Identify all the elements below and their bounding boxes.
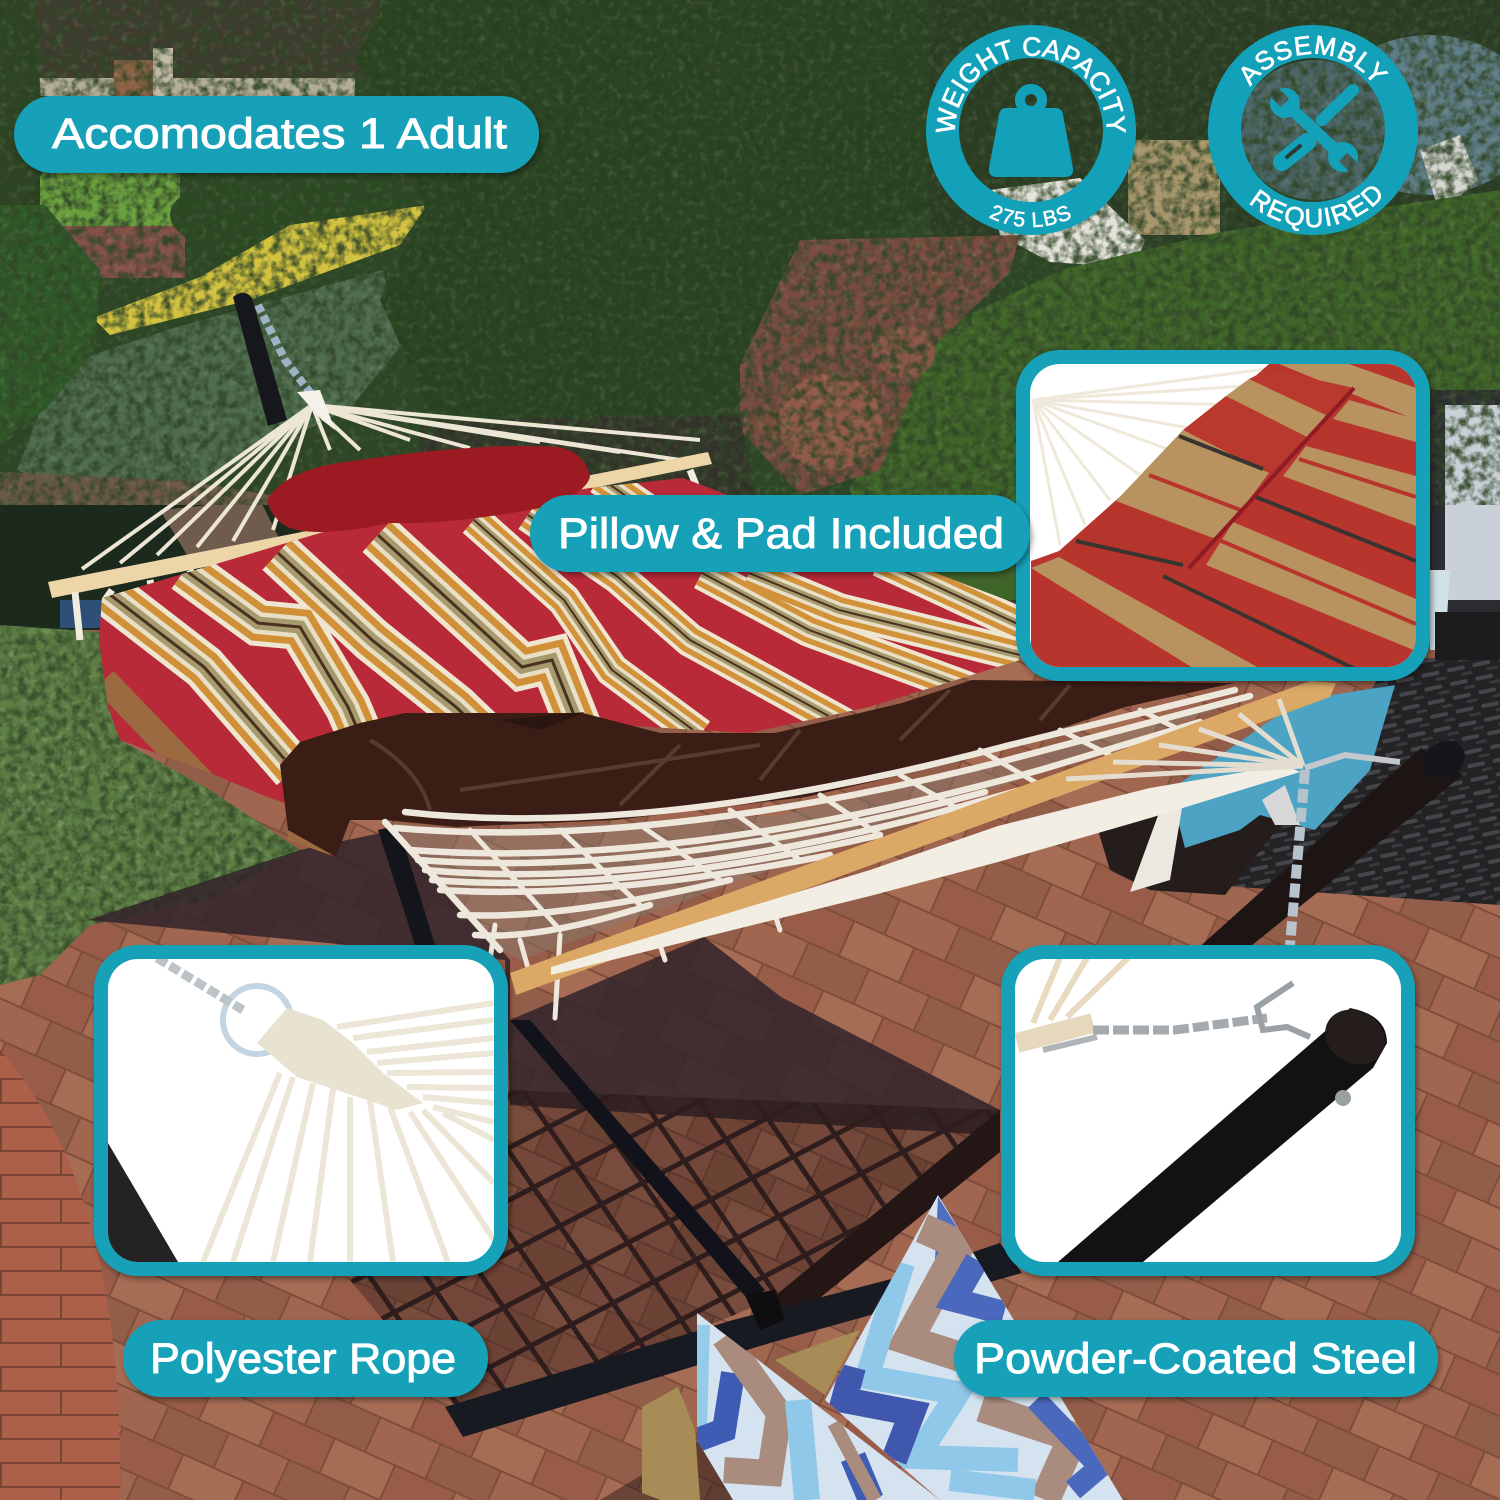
near spreader bar [510, 681, 1336, 995]
striped hammock pad [99, 478, 1020, 857]
hammock stand [233, 293, 1472, 1437]
red pillow on hammock [267, 446, 590, 532]
hammock far ropes [82, 390, 700, 569]
badge: weight capacity [926, 25, 1136, 235]
brown pad underside [280, 680, 1234, 857]
badge: weight capacity: WEIGHT CAPACITY [936, 36, 1126, 133]
label pill: powder coated steel [954, 1320, 1438, 1397]
near end ropes [551, 699, 1303, 975]
label pill: powder coated steel: Powder-Coated Steel [974, 1335, 1417, 1383]
badge: assembly required: REQUIRED [1249, 186, 1381, 232]
badge: assembly required: ASSEMBLY [1241, 35, 1389, 87]
hammock chains [258, 305, 1400, 945]
foliage texture [0, 0, 1500, 990]
tools icon [1270, 88, 1358, 172]
chevron pillow front [697, 1313, 940, 1500]
weight icon [989, 89, 1073, 177]
label pill: polyester rope [123, 1320, 488, 1397]
chevron pillow back [825, 1195, 1123, 1500]
badge: weight capacity: 275 LBS [989, 205, 1071, 228]
basket [642, 1330, 860, 1500]
label pill: pillow and pad [530, 495, 1030, 572]
label pill: polyester rope: Polyester Rope [150, 1335, 456, 1383]
callout inset: steel [1001, 945, 1415, 1276]
heading pill: accommodates: Accomodates 1 Adult [52, 110, 507, 158]
label pill: pillow and pad: Pillow & Pad Included [558, 510, 1004, 558]
heading pill: accommodates [14, 96, 539, 173]
shadow on bricks [88, 830, 1000, 1500]
rope net [385, 690, 1270, 1018]
badge: assembly required [1208, 25, 1418, 235]
callout inset: pillow and pad [1016, 350, 1430, 681]
callout inset: rope [94, 945, 508, 1276]
far spreader bar with knots [48, 452, 712, 640]
